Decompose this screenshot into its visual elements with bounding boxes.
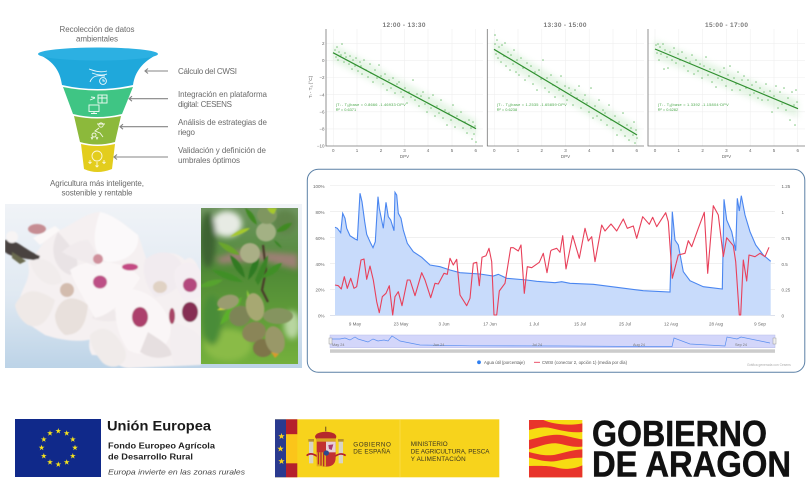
range navigator: Jul 24 — [532, 343, 542, 347]
label: irrigation strategies: riego — [178, 128, 196, 137]
label: digital platform — [178, 90, 268, 109]
date axis labels: 23 May — [394, 322, 409, 326]
x axis labels: 1 — [678, 148, 681, 153]
scatter points — [495, 35, 637, 143]
Aragon flag — [529, 420, 582, 477]
x axis labels: 6 — [474, 148, 477, 153]
outcome text: sostenible y rentable — [62, 188, 133, 198]
EU fund name: Fondo Europeo Agrícola — [108, 442, 216, 451]
date axis labels: 12 Aug — [664, 322, 679, 326]
panel frame — [307, 169, 805, 372]
x axis labels: 5 — [612, 148, 615, 153]
ministry name: DE AGRICULTURA, PESCA — [411, 449, 490, 456]
logo: European Union — [15, 418, 245, 477]
icon: spreadsheet and monitor — [89, 95, 107, 114]
x axis labels: 6 — [635, 148, 638, 153]
label: validation thresholds: umbrales óptimos — [178, 156, 240, 165]
trend line — [494, 49, 637, 135]
left axis labels: 80% — [315, 210, 324, 215]
regression equation — [497, 102, 567, 112]
Aragon wordmark — [592, 413, 791, 485]
right axis labels: 0.75 — [782, 236, 791, 241]
y axis labels: −10 — [317, 144, 325, 149]
EU motto: Europa invierte en las zonas rurales — [108, 468, 245, 477]
x axis labels: 2 — [380, 148, 383, 153]
date axis labels: 15 Jul — [574, 322, 586, 326]
regression equation: (Tₗ - Tₐ)base = 1.2535 -1.65859·DPV — [497, 102, 567, 107]
logo: Government of Spain — [275, 419, 499, 477]
Aragon wordmark: DE ARAGON — [592, 444, 791, 485]
area: available water — [335, 192, 771, 315]
regression equation: R² = 0.6282 — [658, 107, 678, 112]
x axis labels: 6 — [796, 148, 799, 153]
left axis labels: 100% — [313, 184, 324, 189]
label: irrigation strategies: Análisis de estrategias de — [178, 118, 268, 127]
EU stars — [39, 428, 78, 467]
x axis labels: 0 — [332, 148, 335, 153]
photo: almond blossoms — [5, 204, 302, 368]
funnel segment: yellow — [81, 144, 115, 172]
heading: data collection — [60, 25, 134, 44]
left axis labels: 0% — [318, 314, 324, 318]
ministry name: MINISTERIO — [411, 441, 448, 448]
line: CWSI — [335, 206, 769, 315]
scatter chart: 13:30 - 15:00 — [487, 22, 644, 159]
right axis labels: 1 — [782, 210, 784, 215]
x axis labels: DPV — [400, 154, 409, 159]
label: digital platform: digital: CESENS — [178, 100, 232, 109]
arrow: CWSI — [145, 68, 168, 74]
date axis labels: 25 Jul — [619, 322, 631, 326]
funnel segment: olive — [74, 116, 121, 144]
x axis labels: 2 — [541, 148, 544, 153]
chart title: 15:00 - 17:00 — [705, 22, 748, 29]
right axis labels: 0.5 — [782, 262, 788, 267]
photo: green almonds — [200, 206, 300, 364]
x axis labels: 3 — [725, 148, 728, 153]
arrow: platform — [129, 96, 168, 101]
panel: water and CWSI time series — [307, 169, 805, 372]
coat of arms — [307, 427, 346, 467]
regression equation: (Tₗ - Tₐ)base = 1.3392 -1.15804·DPV — [658, 102, 729, 107]
date axis labels: 28 Aug — [709, 322, 724, 326]
ministry name: Y ALIMENTACIÓN — [411, 454, 466, 463]
y axis labels: −4 — [319, 92, 325, 98]
ministry name — [411, 441, 490, 463]
right axis labels: 0 — [782, 314, 784, 318]
line: available water — [335, 192, 771, 292]
scatter points — [656, 44, 797, 125]
heading: data collection: ambientales — [76, 34, 118, 44]
icon: wind and clock — [89, 69, 107, 84]
x axis labels: DPV — [722, 154, 731, 159]
EU heading: Unión Europea — [107, 418, 211, 434]
x axis labels: 0 — [493, 148, 496, 153]
chart credit: Gráfica generada con Cesens — [747, 363, 791, 367]
y axis labels: 0 — [322, 58, 325, 63]
x axis labels: 1 — [356, 148, 359, 153]
outcome text — [50, 179, 144, 198]
heading: data collection: Recolección de datos — [60, 25, 134, 34]
funnel segment: blue — [38, 54, 158, 89]
legend: available water: Agua útil (porcentaje) — [484, 360, 525, 365]
Spanish flag stripes — [275, 419, 297, 477]
icon: farmer — [91, 123, 105, 139]
label: digital platform: Integración en plataforma — [178, 90, 268, 99]
funnel segment: green — [63, 87, 133, 117]
chart title: 13:30 - 15:00 — [544, 22, 587, 29]
trend line — [333, 53, 476, 129]
x axis labels: 4 — [588, 148, 591, 153]
EU fund name — [108, 442, 216, 461]
arrow: strategies — [120, 124, 168, 129]
scatter chart: 15:00 - 17:00 — [648, 22, 805, 159]
label: CWSI calculation: Cálculo del CWSI — [178, 67, 237, 76]
scatter points — [335, 44, 476, 142]
left axis labels: 20% — [315, 288, 324, 292]
y axis labels: −8 — [319, 126, 325, 132]
x axis labels: 3 — [564, 148, 567, 153]
left axis labels: 40% — [315, 262, 324, 267]
EU flag — [15, 419, 101, 477]
x axis labels: 2 — [701, 148, 704, 153]
navigator scrollbar — [330, 349, 775, 353]
date axis labels: 3 Jun — [438, 322, 450, 326]
x axis labels: DPV — [561, 154, 570, 159]
x axis labels: 1 — [517, 148, 520, 153]
government name: DE ESPAÑA — [353, 447, 391, 456]
regression equation — [658, 102, 729, 112]
range navigator — [329, 335, 776, 348]
date axis labels: 9 Sep — [754, 322, 766, 326]
regression equation: R² = 0.6371 — [336, 107, 356, 112]
government name: GOBIERNO — [353, 441, 391, 448]
date axis labels: 9 May — [349, 322, 362, 326]
x axis labels: 4 — [427, 148, 430, 153]
range navigator: Sep 24 — [735, 343, 747, 347]
regression equation: R² = 0.6238 — [497, 107, 517, 112]
y axis labels: −6 — [319, 110, 325, 114]
x axis labels: 5 — [451, 148, 454, 153]
logo: Government of Aragon — [529, 413, 791, 485]
right axis labels: 1.25 — [782, 184, 791, 189]
range navigator: May 24 — [332, 343, 344, 347]
government name — [353, 441, 391, 456]
x axis labels: 0 — [654, 148, 657, 153]
left axis labels: 60% — [315, 236, 324, 241]
divider — [399, 419, 401, 477]
EU fund name: de Desarrollo Rural — [108, 452, 193, 461]
y axis labels: 2 — [322, 41, 325, 46]
yellow band — [275, 419, 499, 477]
right axis labels: 0.25 — [782, 288, 791, 292]
label: validation thresholds: Validación y definición de — [178, 146, 267, 155]
regression equation — [336, 102, 406, 112]
range navigator: Jun 24 — [433, 343, 444, 347]
arrow: validation — [114, 154, 168, 160]
y axis labels: −2 — [319, 75, 325, 80]
date axis labels: 17 Jun — [483, 322, 497, 326]
range navigator: Aug 24 — [633, 343, 645, 347]
trend line — [655, 49, 798, 109]
x axis labels: 5 — [773, 148, 776, 153]
outcome text: Agricultura más inteligente, — [50, 179, 144, 188]
scatter chart: 12:00 - 13:30 — [308, 22, 483, 159]
x axis labels: 4 — [749, 148, 752, 153]
label: irrigation strategies — [178, 118, 268, 137]
y axis title: Tₗ - Tₐ (°C) — [308, 75, 314, 98]
regression equation: (Tₗ - Tₐ)base = 0.8666 -1.46933·DPV — [336, 102, 406, 107]
legend: CWSI: CWSI (conector 2, opción 1) (media por día) — [542, 360, 628, 365]
Aragon wordmark: GOBIERNO — [592, 413, 767, 454]
date axis labels: 1 Jul — [529, 322, 539, 326]
chart title: 12:00 - 13:30 — [382, 22, 426, 29]
funnel rim — [38, 48, 158, 60]
funnel diagram — [38, 25, 268, 198]
icon: threshold target — [88, 151, 106, 167]
x axis labels: 3 — [403, 148, 406, 153]
label: validation thresholds — [178, 146, 267, 165]
